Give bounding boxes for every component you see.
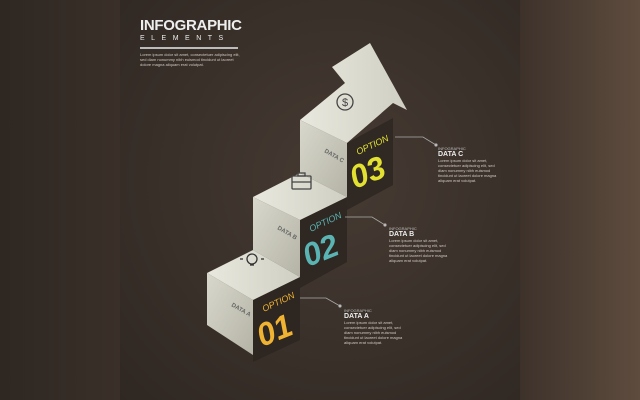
callout: data A: Lorem ipsum dolor sit amet, consectetuer adipiscing elit, sed diam nonummy nibh euismod tincidunt ut laoreet dolore magna aliquam erat volutpat. xyxy=(344,320,402,345)
callout: data A: DATA A xyxy=(344,313,369,320)
callout: data B: DATA B xyxy=(389,231,414,238)
side labels: DATA C xyxy=(323,149,345,165)
option 01: OPTION xyxy=(261,290,297,314)
side labels: DATA B xyxy=(276,226,298,242)
callout: data B: INFOGRAPHIC xyxy=(389,226,417,231)
option 03: OPTION xyxy=(355,133,391,157)
dark front faces xyxy=(253,277,300,362)
title: ELEMENTS xyxy=(140,35,230,42)
treads xyxy=(207,250,300,300)
callout: data C xyxy=(438,146,496,183)
title xyxy=(140,17,242,67)
side faces xyxy=(207,273,253,355)
arrow top xyxy=(300,43,407,143)
callout: data B xyxy=(389,226,448,263)
callout: data C: DATA C xyxy=(438,151,463,158)
connector lines xyxy=(300,137,437,307)
icon: light bulb xyxy=(240,247,264,265)
title: INFOGRAPHIC xyxy=(140,17,242,34)
callout: data B: Lorem ipsum dolor sit amet, consectetuer adipiscing elit, sed diam nonummy nibh euismod tincidunt ut laoreet dolore magna aliquam erat volutpat. xyxy=(389,238,447,263)
option 02: OPTION xyxy=(308,210,344,234)
callout: data C: INFOGRAPHIC xyxy=(438,146,466,151)
side labels xyxy=(230,149,345,319)
callout: data A xyxy=(344,308,402,345)
icon: dollar xyxy=(337,94,353,110)
option 02: 02 xyxy=(297,227,344,273)
title: Lorem ipsum dolor sit amet, consectetuer adipiscing elit, sed diam nonummy nibh euismod tincidunt ut laoreet dolore magna aliquam erat volutpat. xyxy=(140,52,240,67)
callout: data A: INFOGRAPHIC xyxy=(344,308,372,313)
side labels: DATA A xyxy=(230,303,252,319)
icon: briefcase xyxy=(292,173,311,189)
callout: data C: Lorem ipsum dolor sit amet, consectetuer adipiscing elit, sed diam nonummy nibh euismod tincidunt ut laoreet dolore magna aliquam erat volutpat. xyxy=(438,158,496,183)
option 01: 01 xyxy=(251,307,298,353)
option 03: 03 xyxy=(344,149,391,195)
icon: dollar: $ xyxy=(342,97,348,109)
